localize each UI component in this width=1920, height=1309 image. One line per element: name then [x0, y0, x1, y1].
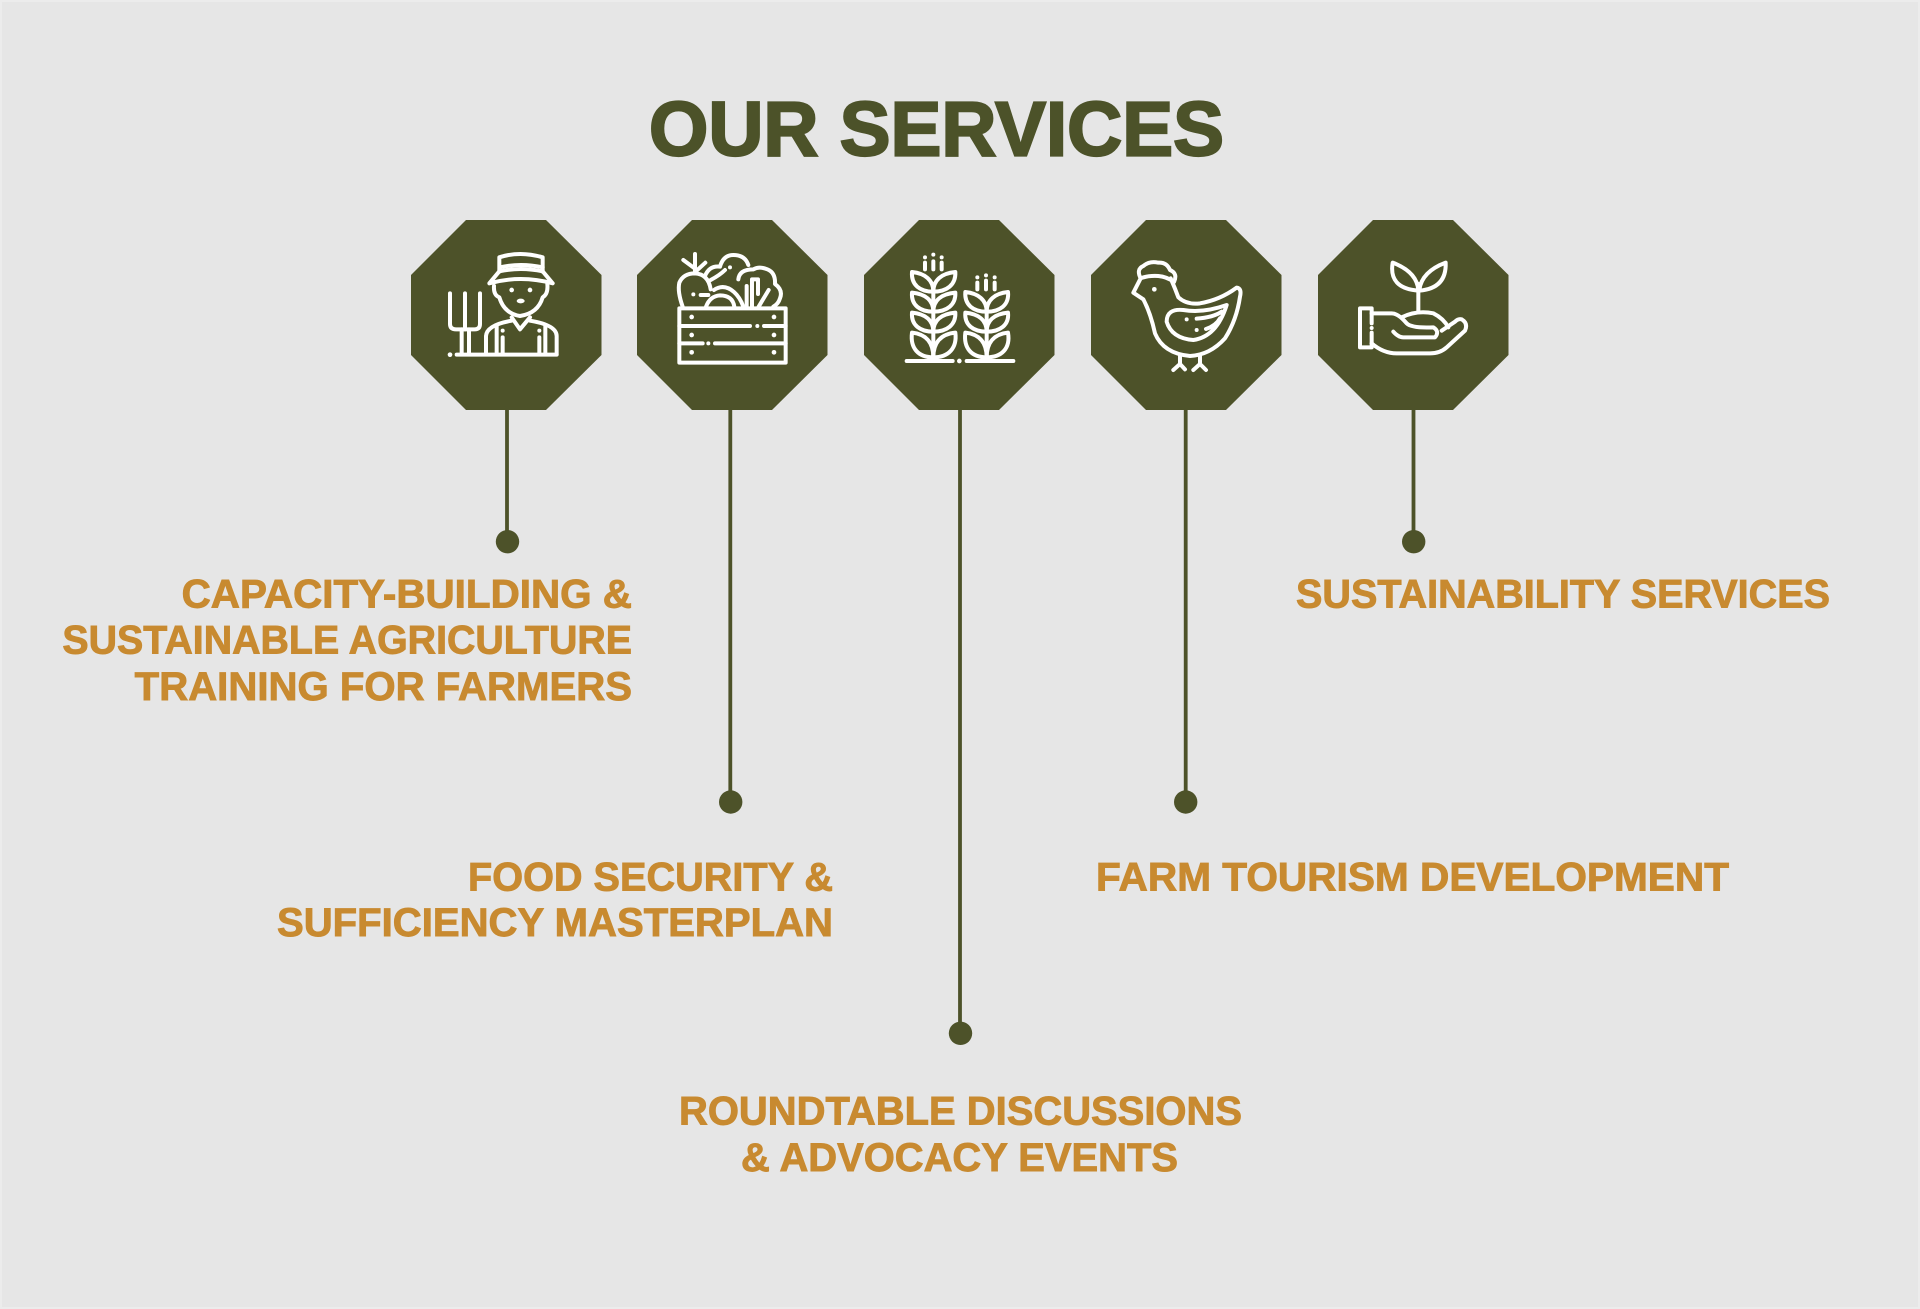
icon badge: octagon	[411, 220, 602, 410]
icon: wheat stalks	[907, 253, 1013, 363]
connector line	[1184, 410, 1188, 795]
service: capacity-building training	[62, 220, 632, 709]
icon: hand holding seedling	[1360, 263, 1466, 353]
icon: farmer with pitchfork	[448, 254, 557, 357]
label	[277, 856, 833, 945]
service: food security masterplan	[277, 220, 833, 945]
connector line	[728, 410, 732, 795]
icon badge: octagon	[637, 220, 828, 410]
connector dot	[496, 530, 519, 553]
icon badge: octagon	[1091, 220, 1282, 410]
label: FOOD SECURITY &	[468, 856, 833, 900]
connector dot	[719, 790, 742, 814]
label	[679, 1090, 1242, 1180]
title: OUR SERVICES	[649, 87, 1224, 173]
service: farm tourism development	[1091, 220, 1729, 900]
service: sustainability services	[1296, 220, 1830, 617]
label: TRAINING FOR FARMERS	[135, 665, 632, 709]
icon: vegetable crate	[679, 254, 786, 363]
icon: chicken	[1133, 262, 1241, 370]
label: & ADVOCACY EVENTS	[741, 1136, 1178, 1180]
label: SUSTAINABLE AGRICULTURE	[62, 619, 632, 663]
label: CAPACITY-BUILDING &	[182, 573, 632, 617]
connector line	[505, 410, 509, 535]
service: roundtable discussions	[679, 220, 1242, 1180]
label	[62, 573, 632, 709]
label: SUSTAINABILITY SERVICES	[1296, 573, 1830, 617]
connector dot	[1174, 790, 1197, 814]
connector dot	[949, 1022, 972, 1045]
connector line	[958, 410, 962, 1026]
label: ROUNDTABLE DISCUSSIONS	[679, 1090, 1242, 1134]
icon badge: octagon	[864, 220, 1054, 410]
label: FARM TOURISM DEVELOPMENT	[1096, 856, 1729, 900]
connector dot	[1402, 530, 1425, 553]
connector line	[1412, 410, 1415, 535]
icon badge: octagon	[1318, 220, 1508, 410]
label: SUFFICIENCY MASTERPLAN	[277, 901, 833, 945]
